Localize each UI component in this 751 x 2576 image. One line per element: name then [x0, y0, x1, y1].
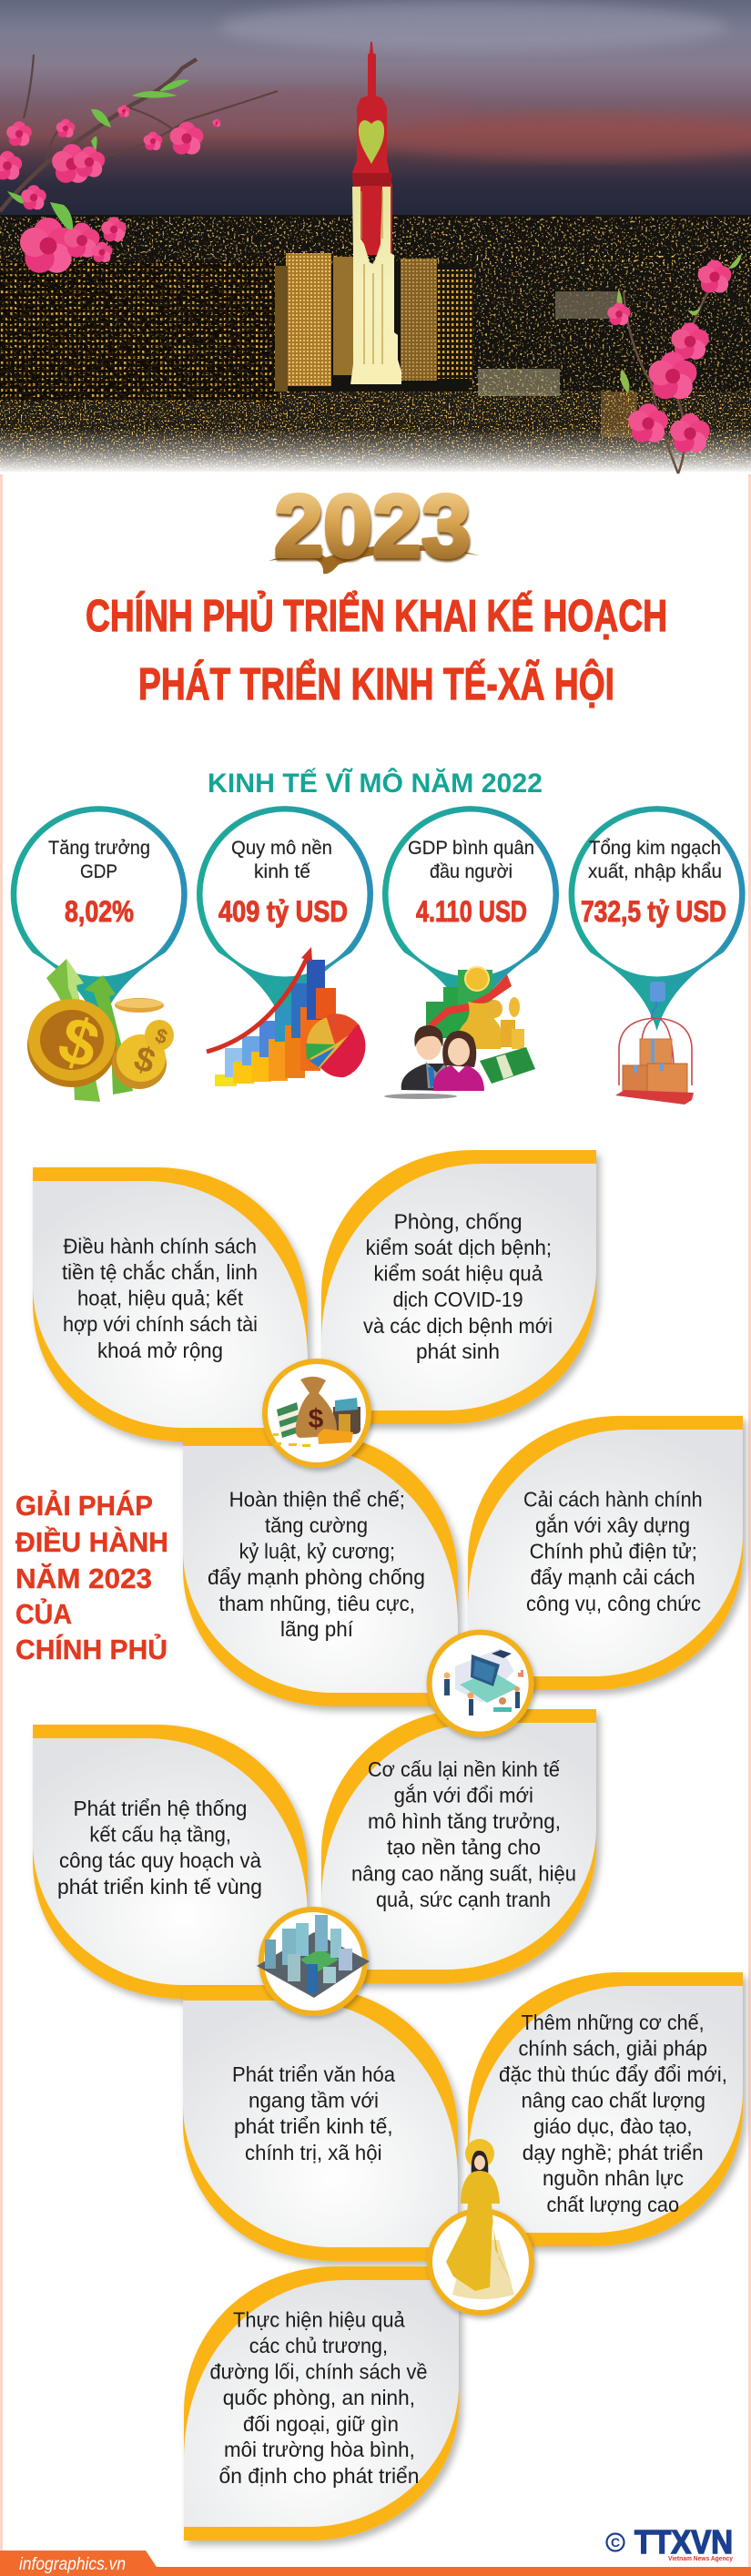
petal 7: Phát triển văn hóa — [232, 2062, 395, 2086]
petal 1: Điều hành chính sách — [64, 1235, 257, 1258]
petal 4: công vụ, công chức — [526, 1592, 701, 1615]
section heading: solutions: NĂM 2023 — [15, 1563, 152, 1594]
petal 9: Thực hiện hiệu quả — [233, 2307, 405, 2331]
pin: economy size: 409 tỷ USD — [218, 895, 348, 928]
pin: GDP growth: GDP — [80, 861, 117, 882]
petal 2: dịch COVID-19 — [393, 1288, 523, 1311]
petal 3: đẩy mạnh phòng chống — [208, 1565, 425, 1589]
petal 2: và các dịch bệnh mới — [363, 1314, 553, 1338]
section heading: solutions: GIẢI PHÁP — [15, 1490, 153, 1522]
petal 1: hợp với chính sách tài — [63, 1312, 258, 1336]
icon: bar chart with pie — [207, 947, 365, 1086]
petal 9: ổn định cho phát triển — [218, 2464, 419, 2488]
petal 3 — [183, 1432, 458, 1706]
logo: TTXVN — [606, 2523, 733, 2562]
petal 4: gắn với xây dựng — [535, 1513, 690, 1537]
logo: 2023 gold: 2023 — [274, 476, 471, 575]
petal 9: quốc phòng, an ninh, — [223, 2386, 415, 2409]
section heading: solutions: CHÍNH PHỦ — [15, 1633, 167, 1665]
petal 2: kiểm soát dịch bệnh; — [366, 1236, 552, 1259]
petal 3: tăng cường — [265, 1513, 368, 1537]
petal 8: chất lượng cao — [546, 2193, 679, 2216]
pin: import export turnover: Tổng kim ngạch — [589, 838, 721, 859]
petal 6: nâng cao năng suất, hiệu — [351, 1862, 576, 1886]
petal 3: tham nhũng, tiêu cực, — [218, 1592, 415, 1615]
peach blossom branch right — [607, 253, 742, 473]
landmark tower — [350, 42, 401, 384]
petal 7: chính trị, xã hội — [245, 2141, 382, 2164]
circle icon: money bag — [265, 1361, 369, 1465]
section heading: solutions — [15, 1490, 168, 1665]
icon: coins and arrows: $ — [129, 1039, 159, 1082]
pin: GDP per capita: đầu người — [430, 861, 513, 882]
logo: TTXVN: Vietnam News Agency — [668, 2556, 733, 2562]
title: PHÁT TRIỂN KINH TẾ-XÃ HỘI — [138, 659, 614, 709]
circle icon: city — [257, 1909, 370, 2013]
header photo: city at dusk — [0, 0, 751, 474]
pin: GDP growth: 8,02% — [65, 895, 134, 928]
pin: GDP per capita: GDP bình quân — [408, 838, 534, 859]
pin: GDP growth: Tăng trưởng — [48, 838, 150, 859]
petal 8: Thêm những cơ chế, — [522, 2011, 705, 2034]
petal 5: Phát triển hệ thống — [73, 1797, 248, 1820]
icon: couple with money — [384, 967, 535, 1099]
footer band — [0, 2551, 751, 2576]
petal 6: quả, sức cạnh tranh — [376, 1888, 551, 1911]
logo: TTXVN: C — [611, 2535, 620, 2550]
pin: economy size: kinh tế — [254, 861, 310, 882]
title — [86, 591, 667, 709]
petal 1: hoạt, hiệu quả; kết — [77, 1287, 244, 1310]
petal 6: tạo nền tảng cho — [387, 1836, 541, 1859]
petal 9 — [184, 2266, 459, 2540]
petal 3: kỷ luật, kỷ cương; — [239, 1540, 395, 1563]
petal 8: giáo dục, đào tạo, — [533, 2114, 692, 2138]
pin: import export turnover — [569, 806, 746, 1031]
petal 5: kết cấu hạ tầng, — [89, 1822, 231, 1846]
icon: coins and arrows: $ — [50, 1003, 107, 1083]
petal 1: tiền tệ chắc chắn, linh — [62, 1260, 258, 1284]
petal 7 — [183, 1987, 458, 2261]
petal 2: Phòng, chống — [394, 1209, 523, 1233]
petal 6: Cơ cấu lại nền kinh tế — [368, 1757, 560, 1781]
petal 5: phát triển kinh tế vùng — [57, 1875, 262, 1899]
petal 9: các chủ trương, — [249, 2334, 388, 2357]
circle icon: digital technology — [430, 1633, 532, 1735]
petal 8 — [468, 1972, 743, 2246]
pin: economy size: Quy mô nền — [231, 838, 332, 859]
petal 2: kiểm soát hiệu quả — [373, 1262, 543, 1286]
heading: macro economy: KINH TẾ VĨ MÔ NĂM 2022 — [208, 768, 543, 799]
petal 8: đặc thù thúc đẩy đổi mới, — [499, 2062, 727, 2086]
petal 1: khoá mở rộng — [97, 1339, 223, 1362]
petal 4: đẩy mạnh cải cách — [531, 1565, 695, 1589]
logo: TTXVN: TTXVN — [634, 2523, 733, 2561]
petal 9: đối ngoại, giữ gìn — [243, 2412, 399, 2436]
circle icon: money bag: $ — [309, 1404, 324, 1434]
petal 8: nguồn nhân lực — [543, 2166, 684, 2190]
petal 9: môi trường hòa bình, — [224, 2438, 415, 2461]
petal 4 — [468, 1416, 743, 1690]
petal 3: lãng phí — [280, 1617, 354, 1641]
petal 8: nâng cao chất lượng — [522, 2089, 705, 2113]
petal 6: gắn với đổi mới — [394, 1784, 533, 1807]
petal 5: công tác quy hoạch và — [59, 1848, 261, 1872]
petal 4: Chính phủ điện tử; — [530, 1540, 697, 1563]
petal 7: phát triển kinh tế, — [234, 2114, 393, 2138]
section heading: solutions: CỦA — [15, 1597, 72, 1630]
icon: coins and arrows: $ — [153, 1023, 170, 1049]
pin: GDP growth — [11, 806, 188, 1031]
pin: GDP per capita — [382, 806, 559, 1031]
petal 2 — [321, 1150, 596, 1424]
section heading: solutions: ĐIỀU HÀNH — [15, 1526, 168, 1558]
petal 7: ngang tầm với — [249, 2089, 379, 2113]
petal 1 — [33, 1167, 308, 1441]
petal 4: Cải cách hành chính — [523, 1488, 703, 1512]
petal 9: đường lối, chính sách về — [209, 2360, 428, 2384]
peach blossom branch left — [0, 55, 278, 273]
pin: import export turnover: xuất, nhập khẩu — [588, 861, 722, 882]
petal 6: mô hình tăng trưởng, — [368, 1809, 561, 1833]
petal 6 — [321, 1709, 596, 1983]
petal 8: dạy nghề; phát triển — [523, 2141, 704, 2164]
circle icon: woman in ao dai — [430, 2139, 532, 2313]
petal 8: chính sách, giải pháp — [519, 2037, 707, 2061]
pin: economy size — [197, 806, 373, 1031]
pin: GDP per capita: 4.110 USD — [416, 895, 527, 928]
petal 3: Hoàn thiện thể chế; — [229, 1488, 405, 1512]
footer band: infographics.vn — [19, 2555, 126, 2574]
petal 5 — [33, 1725, 308, 1999]
petal 2: phát sinh — [416, 1339, 500, 1363]
icon: coins and arrows — [27, 959, 174, 1102]
icon: cargo boxes — [615, 982, 694, 1105]
